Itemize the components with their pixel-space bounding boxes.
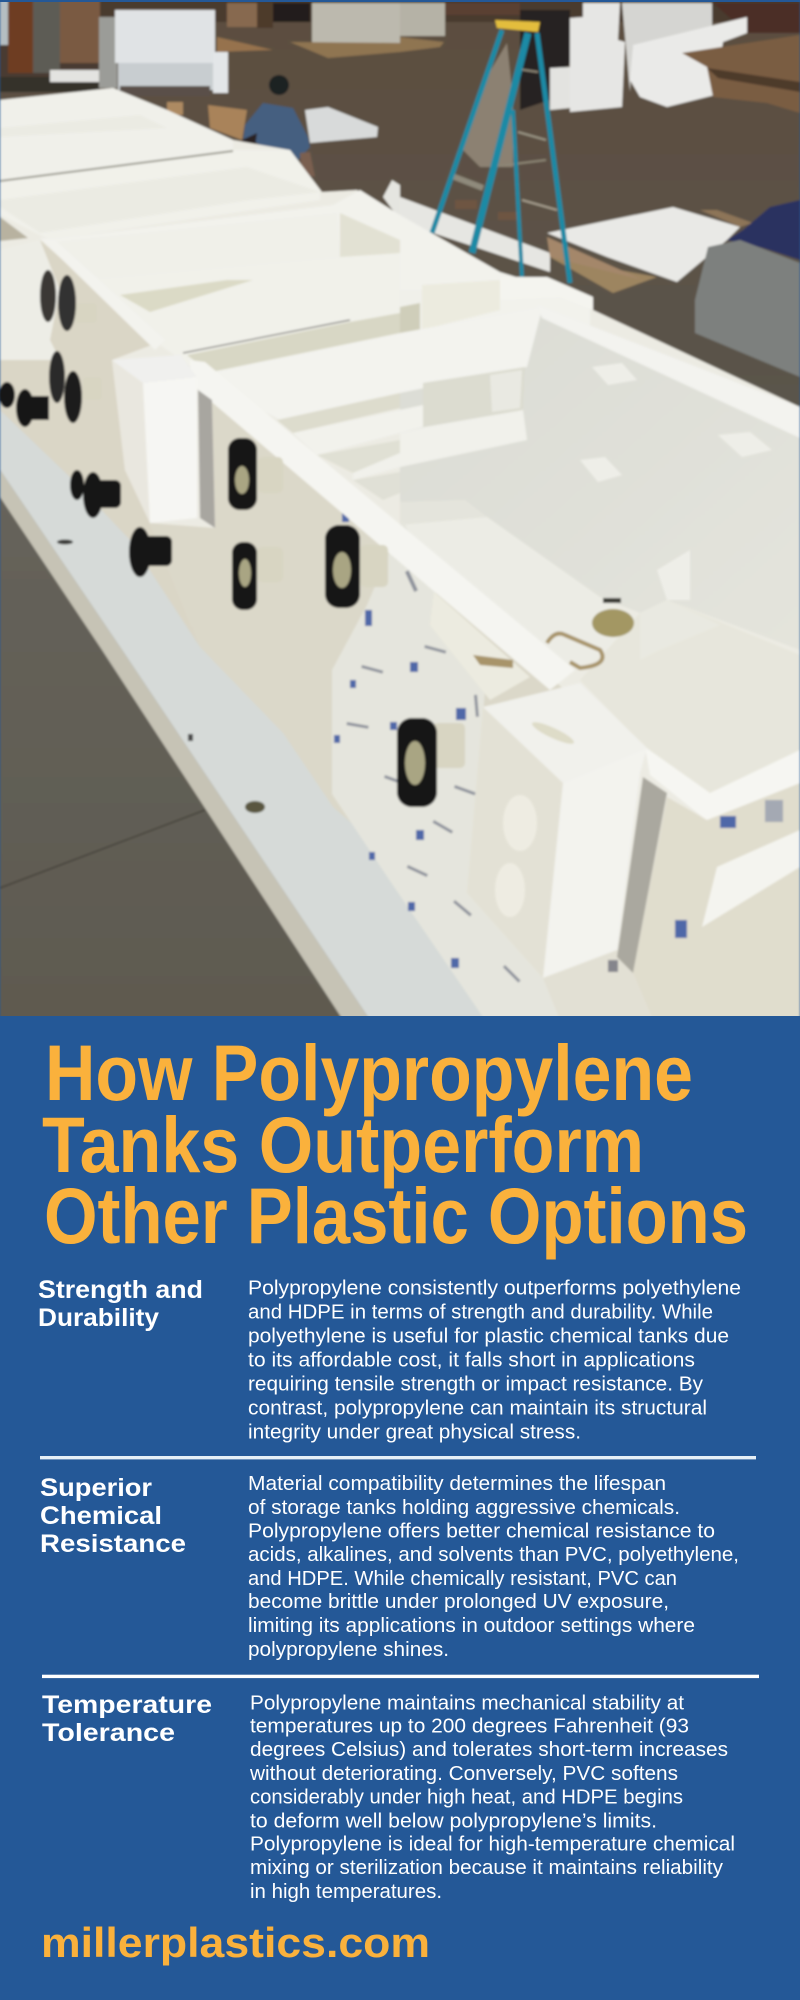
worker: [240, 75, 315, 177]
heading: strength and durability: [38, 1276, 203, 1332]
photo: polypropylene tanks in a workshop: [0, 2, 800, 1016]
lower right wall: [543, 777, 800, 1020]
main side wall: [150, 390, 620, 1020]
near tank interior: [400, 310, 800, 660]
heading: temperature tolerance: Tolerance: [42, 1719, 175, 1747]
body text: strength and durability: Polypropylene consistently outperforms polyethylene: [248, 1276, 741, 1299]
upper left block: [0, 240, 60, 360]
title: [42, 1028, 748, 1260]
tank base mass: [0, 88, 800, 1020]
left wall rim: [40, 238, 165, 350]
reflections in tank wall: [580, 363, 772, 600]
body text: superior chemical resistance: [248, 1472, 739, 1661]
heading: superior chemical resistance: [40, 1474, 186, 1558]
heading: superior chemical resistance: Chemical: [40, 1502, 162, 1530]
near corner block: [467, 683, 647, 978]
sheet on pallet: [547, 207, 753, 293]
body text: strength and durability: and HDPE in terms of strength and durability. While: [248, 1300, 713, 1323]
heading: superior chemical resistance: Resistance: [40, 1530, 186, 1558]
left corner block: [112, 355, 215, 528]
body text: superior chemical resistance: polypropylene shines.: [248, 1638, 449, 1661]
tank floor step: [400, 500, 640, 675]
blue content panel: [0, 1016, 800, 2000]
body text: temperature tolerance: mixing or sterilization because it maintains reliability: [250, 1856, 724, 1879]
left side wall: [0, 240, 200, 647]
body text: superior chemical resistance: limiting its applications in outdoor settings where: [248, 1614, 695, 1637]
heading: temperature tolerance: [42, 1691, 212, 1747]
ledge over strap: [640, 600, 720, 660]
middle tank interior: [83, 253, 500, 380]
flange holes: [235, 466, 425, 785]
body text: strength and durability: to its affordable cost, it falls short in applications: [248, 1348, 695, 1371]
body text: temperature tolerance: temperatures up to 200 degrees Fahrenheit (93: [250, 1715, 689, 1738]
floor foreground: [0, 497, 343, 1020]
heading: strength and durability: Durability: [38, 1304, 159, 1332]
base slab: [0, 400, 485, 1020]
body text: superior chemical resistance: acids, alkalines, and solvents than PVC, polyethylene,: [248, 1543, 739, 1566]
stepladder: [432, 20, 570, 283]
body text: strength and durability: polyethylene is useful for plastic chemical tanks due: [248, 1324, 729, 1347]
body text: superior chemical resistance: become brittle under prolonged UV exposure,: [248, 1590, 669, 1613]
body text: strength and durability: contrast, polypropylene can maintain its structural: [248, 1396, 707, 1419]
body text: superior chemical resistance: Material compatibility determines the lifespan: [248, 1472, 666, 1495]
person behind ladder: [455, 43, 518, 220]
photo edge strip: [0, 0, 800, 2]
body text: superior chemical resistance: Polypropylene offers better chemical resistance to: [248, 1520, 715, 1542]
section: temperature tolerance: [42, 1691, 735, 1903]
section: strength and durability: [38, 1276, 741, 1443]
body text: temperature tolerance: Polypropylene maintains mechanical stability at: [250, 1691, 684, 1714]
warehouse floor: [0, 0, 800, 1020]
tray on right: [580, 600, 800, 823]
body text: temperature tolerance: in high temperatures.: [250, 1880, 442, 1903]
title: Tanks Outperform: [42, 1100, 644, 1189]
grey machine: [695, 200, 800, 377]
body text: temperature tolerance: [249, 1691, 735, 1903]
long tank rim: [190, 360, 575, 690]
body text: strength and durability: requiring tensile strength or impact resistance. By: [248, 1372, 704, 1395]
black flanges: [0, 270, 437, 807]
far tanks: [0, 88, 590, 360]
website url: millerplastics.com: [41, 1919, 430, 1966]
body text: superior chemical resistance: and HDPE. While chemically resistant, PVC can: [248, 1567, 677, 1590]
gold straps: [473, 598, 634, 668]
title: How Polypropylene: [45, 1028, 693, 1117]
body text: temperature tolerance: Polypropylene is ideal for high-temperature chemical: [250, 1833, 735, 1856]
sticker film: [332, 520, 587, 1020]
body text: temperature tolerance: considerably under high heat, and HDPE begins: [250, 1785, 683, 1808]
section: superior chemical resistance: [40, 1472, 739, 1661]
body text: temperature tolerance: to deform well below polypropylene’s limits.: [250, 1809, 657, 1832]
pipe stubs: [75, 303, 465, 768]
body text: temperature tolerance: without deteriorating. Conversely, PVC softens: [249, 1762, 678, 1785]
body text: strength and durability: [248, 1276, 741, 1443]
outer step beside rim: [430, 592, 530, 700]
heading: superior chemical resistance: Superior: [40, 1474, 152, 1502]
white tab and sheet behind ladder: [383, 180, 550, 272]
heading: strength and durability: Strength and: [38, 1276, 203, 1304]
tank rim and baffles: [197, 277, 800, 500]
sticker marks: [334, 510, 466, 968]
body text: superior chemical resistance: of storage tanks holding aggressive chemicals.: [248, 1496, 680, 1519]
body text: temperature tolerance: degrees Celsius) and tolerates short-term increases: [250, 1738, 728, 1761]
warehouse background clutter: [0, 0, 800, 113]
boxes and sheet near worker: [167, 102, 378, 143]
body text: strength and durability: integrity under great physical stress.: [248, 1420, 581, 1443]
heading: temperature tolerance: Temperature: [42, 1691, 212, 1719]
